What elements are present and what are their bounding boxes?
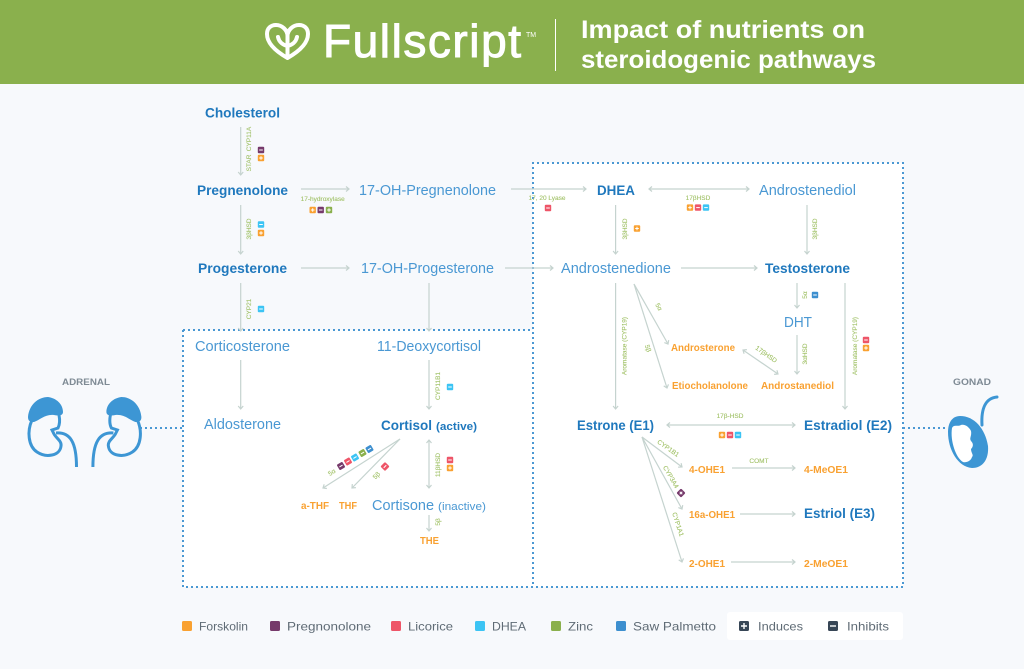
header title: steroidogenic pathways (581, 46, 876, 74)
enzyme labels: CYP3A4 (661, 465, 680, 490)
panel: adrenal region (183, 330, 533, 587)
arrows: gonad pathway (616, 189, 845, 562)
legend: forskolin: Forskolin (199, 620, 248, 634)
metabolite labels: 16a-OHE1 (689, 509, 735, 521)
hormone labels: primary: Cholesterol (205, 106, 280, 120)
enzyme labels: 17β-HSD (717, 413, 744, 420)
legend: inhibits: Inhibits (847, 620, 889, 634)
header title: Impact of nutrients on (581, 16, 865, 44)
enzyme labels: 17βHSD (686, 195, 711, 202)
legend: zinc: Zinc (568, 620, 593, 634)
legend: induces: Induces (758, 620, 803, 634)
legend: zinc (551, 620, 593, 634)
enzyme labels: 17βHSD (754, 345, 778, 365)
enzyme labels: CYP1A1 (670, 512, 685, 538)
enzyme labels: 17, 20 Lyase (529, 195, 566, 202)
dotted region borders (140, 163, 948, 587)
enzyme labels: 5α (327, 468, 337, 478)
metabolite labels: 2-MeOE1 (804, 558, 848, 570)
hormone labels: primary: Cortisol (381, 418, 432, 433)
hormone labels: secondary: Aldosterone (204, 417, 281, 433)
hormone labels: secondary: (inactive) (438, 501, 486, 513)
legend (182, 612, 903, 640)
label: adrenal: ADRENAL (62, 377, 110, 388)
legend: licorice (391, 620, 453, 634)
legend: dhea (475, 620, 526, 634)
hormone labels: primary: DHEA (597, 183, 635, 198)
enzyme labels: CYP11B1 (435, 372, 442, 400)
metabolite labels: Etiocholanolone (672, 380, 748, 392)
enzyme labels (246, 126, 859, 538)
legend: dhea: DHEA (492, 620, 526, 634)
enzyme labels: STAR (246, 154, 253, 171)
nutrient badges (258, 147, 869, 498)
metabolite labels: Androstanediol (761, 380, 834, 392)
enzyme labels: 5β (643, 344, 652, 353)
enzyme labels: 17-hydroxylase (301, 196, 345, 203)
hormone labels: secondary (195, 183, 856, 514)
hormone labels: secondary: Corticosterone (195, 339, 290, 355)
enzyme labels: 3βHSD (246, 218, 253, 240)
enzyme labels: 3βHSD (812, 218, 819, 240)
hormone labels: primary: Pregnenolone (197, 183, 288, 198)
legend: induces and inhibits panel (727, 612, 903, 640)
legend: licorice: Licorice (408, 620, 453, 634)
panel: gonad region (533, 163, 903, 587)
legend: pregnonolone: Pregnonolone (287, 620, 371, 634)
enzyme labels: 5β (435, 518, 442, 526)
trademark: TM (526, 32, 536, 39)
hormone labels: secondary: 17-OH-Pregnenolone (359, 183, 496, 199)
metabolite labels: 4-MeOE1 (804, 464, 848, 476)
icon: gonad (948, 377, 997, 468)
enzyme labels: CYP21 (246, 298, 253, 319)
hormone labels: primary: Estradiol (E2) (804, 418, 892, 433)
hormone labels: primary: Estrone (E1) (577, 418, 654, 433)
enzyme labels: Aromatase (CYP19) (622, 317, 628, 375)
hormone labels: secondary: 17-OH-Progesterone (361, 261, 494, 277)
legend: inhibits (828, 620, 889, 634)
enzyme labels: CYP1B1 (656, 439, 680, 459)
metabolite labels (301, 342, 848, 570)
hormone labels: secondary: Androstenediol (759, 183, 856, 199)
enzyme labels: 11βHSD (435, 453, 442, 477)
hormone labels: primary: Progesterone (198, 261, 287, 276)
enzyme labels: 3βHSD (622, 218, 629, 240)
hormone labels: secondary: Androstenedione (561, 261, 671, 277)
metabolite labels: THF (339, 500, 358, 512)
metabolite labels: 4-OHE1 (689, 464, 725, 476)
metabolite labels: a-THF (301, 500, 330, 512)
enzyme labels: CYP11A (246, 126, 253, 151)
enzyme labels: COMT (749, 458, 769, 465)
hormone labels: secondary: DHT (784, 315, 812, 331)
metabolite labels: THE (420, 535, 439, 547)
header divider (555, 19, 556, 71)
enzyme labels: 5α (802, 291, 809, 299)
hormone labels: primary: Estriol (E3) (804, 506, 875, 521)
logo wordmark: Fullscript (323, 15, 521, 67)
icon: Fullscript heart logo (267, 25, 308, 58)
metabolite labels: Androsterone (671, 342, 735, 354)
legend: saw palmetto: Saw Palmetto (633, 620, 716, 634)
hormone labels: secondary: Cortisone (372, 498, 434, 514)
hormone labels: primary: Testosterone (765, 261, 850, 276)
icon: adrenal kidneys (28, 377, 141, 467)
header banner (0, 0, 1024, 84)
header title (581, 16, 876, 74)
hormone labels: primary (197, 106, 892, 521)
metabolite labels: 2-OHE1 (689, 558, 725, 570)
enzyme labels: Aromatase (CYP19) (852, 317, 859, 375)
enzyme labels: 3αHSD (802, 343, 809, 365)
enzyme labels: 5β (372, 471, 382, 481)
arrows: adrenal and upper pathway (241, 127, 586, 531)
legend: induces (739, 620, 803, 634)
hormone labels: secondary: 11-Deoxycortisol (377, 339, 481, 355)
hormone labels: primary: (active) (436, 421, 477, 433)
enzyme labels: 5α (653, 302, 663, 312)
label: gonad: GONAD (953, 377, 991, 388)
